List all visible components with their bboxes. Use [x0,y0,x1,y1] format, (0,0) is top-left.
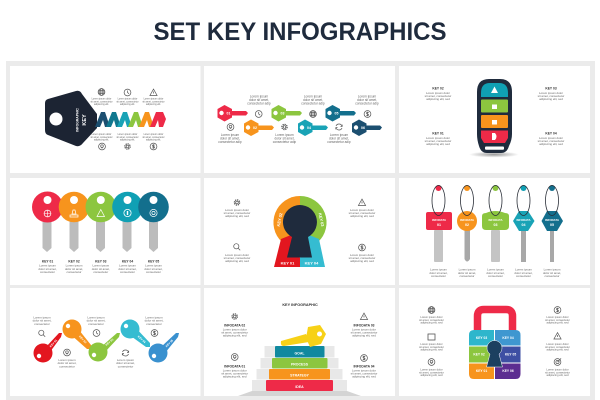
panel: padlock [419,307,570,379]
key head 01: INFODATA [432,218,446,222]
stairs right text: sit amet, consectetur [351,372,377,376]
key 06 navy: 06 [361,126,365,130]
lock text left: sit amet, consectetur [419,345,444,349]
key green: KEY 03 [104,337,115,347]
captions: dolor sit amet, [486,271,505,275]
lock text left: sit amet, consectetur [419,370,444,374]
text blocks top: Lorem ipsum dolor [118,98,138,100]
fob text KEY 01: adipiscing elit, sed [426,142,450,146]
key head 02: 02 [465,223,469,227]
lock labels: KEY 06 [502,369,514,373]
fob text KEY 01: KEY 01 [432,132,444,136]
captions: consectetur [118,364,133,368]
text blocks top [90,98,165,106]
key teal [120,320,150,347]
lock text left: adipiscing elit, sed [421,373,443,377]
lock text left: adipiscing elit, sed [421,348,443,352]
key captions: Lorem ipsum [66,264,83,268]
lock keyhole [486,341,502,367]
lock labels [473,336,516,373]
fob text KEY 04: sit amet, consectetur [538,139,564,143]
text blocks top: Lorem ipsum dolor [144,98,164,100]
fob text KEY 01: Lorem ipsum dolor [426,136,450,140]
fob text KEY 02: Lorem ipsum dolor [426,91,450,95]
key 02 orange [244,120,274,136]
captions: dolor sit amet, [87,318,106,322]
step idea: IDEA [295,385,304,389]
stair backgrounds [238,346,361,396]
captions: dolor sit amet, [458,271,476,275]
keyhole text: sit amet, consectetur [349,211,375,215]
lock text left [419,315,444,377]
leg blue [300,235,325,267]
fob text KEY 01 [425,132,451,146]
segment labels [276,212,325,266]
key rings [432,186,558,216]
timeline text: consectetur adip [218,140,242,144]
text blocks top: Lorem ipsum dolor [92,98,112,100]
key captions: KEY 01 [42,260,53,264]
stairs right text: Lorem ipsum dolor [352,328,376,332]
keyhole text [224,208,375,263]
keyhole text: Lorem ipsum dolor [225,253,249,257]
keyhole text: sit amet, consectetur [224,211,250,215]
fob shadow [469,152,519,158]
captions: Lorem ipsum [87,316,105,320]
captions: dolor sit amet, [429,271,448,275]
text blocks bottom: sit amet, consectetur [116,136,139,139]
timeline text: consectetur adip [247,102,271,106]
stairs right text: INFODATA 03 [353,324,375,328]
captions: Lorem ipsum [515,268,532,272]
stairs left text: sit amet, consectetur [221,330,248,334]
key captions: KEY 05 [148,260,159,264]
key red: KEY 01 [49,338,58,348]
key captions: KEY 04 [122,260,133,264]
text blocks bottom [90,133,165,142]
lock text right: adipiscing elit, sed [547,321,569,325]
captions: consectetur [545,274,560,278]
timeline text: dolor sit amet, [274,136,295,140]
key 06 navy [352,120,382,136]
key head 04: INFODATA [516,218,531,222]
captions: dolor sit amet, [58,361,77,365]
keyhole text: adipiscing elit, sed [225,259,249,263]
captions: Lorem ipsum [459,268,476,272]
key 04 teal: 04 [307,126,311,130]
key 01 red [218,105,248,122]
keyhole text: Lorem ipsum dolor [350,208,374,212]
fob text KEY 04: Lorem ipsum dolor [539,136,563,140]
segment labels: KEY 02 [276,212,284,227]
keyhole text: sit amet, consectetur [224,256,250,260]
panel: diagonal keys [33,316,179,368]
step strategy: STRATEGY [290,374,310,378]
key captions: Lorem ipsum [39,264,56,268]
ring dots [436,185,555,191]
key head 05: INFODATA [545,218,559,222]
stairs right text [351,313,377,378]
key captions: consectetur [146,270,161,274]
fob body [477,79,512,153]
fob text KEY 02: sit amet, consectetur [425,94,451,98]
timeline text: Lorem ipsum [221,133,240,137]
timeline text [218,94,379,144]
lock text right: sit amet, consectetur [545,345,570,349]
key head 02 [457,211,477,231]
stairs right text: adipiscing elit, sed [352,334,376,338]
step process: PROCESS [291,362,309,366]
key 05 head [138,192,169,222]
text blocks top: adipiscing elit. [146,103,161,106]
key captions: dolor sit amet, [92,267,110,271]
key head 02: INFODATA [460,218,474,222]
segment labels: KEY 01 [281,260,295,266]
panel: key fob [425,79,564,158]
timeline text: Lorem ipsum [358,94,377,98]
captions: dolor sit amet, [514,271,533,275]
captions: dolor sit amet, [543,271,561,275]
captions: consectetur [34,322,50,326]
key captions: consectetur [67,270,82,274]
key 05 blue [326,105,356,122]
lock text right: Lorem ipsum dolor [546,315,569,319]
key captions: dolor sit amet, [38,267,57,271]
stairs left text: adipiscing elit, sed [223,374,247,378]
stairs right text: INFODATA 04 [353,364,375,368]
key head 04 [513,211,534,231]
captions: consectetur [59,364,75,368]
key 01 head [32,192,63,222]
lock labels: KEY 03 [476,336,487,340]
key captions: consectetur [93,270,108,274]
lock segments [469,330,520,379]
lock labels: KEY 01 [476,369,487,373]
segment labels: KEY 04 [305,260,319,266]
timeline text: dolor sit amet, [329,136,349,140]
keyhole shape [283,205,317,258]
icons [39,330,158,356]
panel: hexagon keys timeline [218,94,382,144]
stairs left text: INFODATA 02 [224,324,245,328]
text blocks bottom: adipiscing elit. [120,138,135,142]
timeline text: consectetur adip [301,102,325,106]
captions: consectetur [488,274,503,278]
lock text right: Lorem ipsum dolor [546,342,569,346]
fob button red [481,130,508,143]
key head 01 [426,212,452,230]
timeline text: consectetur adip [355,102,379,106]
stairs left text: sit amet, consectetur [221,372,248,376]
text blocks bottom: sit amet, consectetur [142,136,165,139]
panel: five round keys [32,192,169,274]
keyhole text: Lorem ipsum dolor [350,253,374,257]
stairs left text: INFODATA 01 [224,364,245,368]
icons bottom [99,143,157,150]
fob text KEY 04: adipiscing elit, sed [539,142,563,146]
key orange [62,320,91,349]
key captions: Lorem ipsum [119,264,136,268]
stairs left text [221,314,248,378]
key blades [434,230,554,262]
lock text right: sit amet, consectetur [545,370,570,374]
key blue: KEY 05 [164,338,174,348]
zigzag blade [95,112,166,127]
timeline text: Lorem ipsum [330,133,349,137]
lock text right: adipiscing elit, sed [547,348,569,352]
ring left orange [273,196,300,242]
fob text KEY 02: KEY 02 [432,86,444,90]
step goal: GOAL [294,352,305,356]
captions: consectetur [460,274,475,278]
timeline text: Lorem ipsum [250,94,269,98]
step process [272,358,328,368]
key head label: INFOGRAPHIC [76,108,80,132]
timeline icons [227,111,371,130]
key head 04: 04 [522,223,526,227]
lock text right: sit amet, consectetur [545,318,570,322]
ring right green [300,196,327,242]
text blocks top: sit amet, consectetur [142,100,165,103]
lock text right: adipiscing elit, sed [547,373,569,377]
lock text left: Lorem ipsum dolor [420,368,443,372]
captions: Lorem ipsum [430,268,447,272]
fob button orange [481,115,508,128]
lock text right [545,315,570,377]
timeline text: Lorem ipsum [304,94,323,98]
key blades [42,220,158,252]
text blocks bottom: Lorem ipsum dolor [92,133,112,136]
text blocks top: adipiscing elit. [94,103,109,106]
timeline text: Lorem ipsum [275,133,294,137]
captions: dolor sit amet, [116,361,135,365]
leg red [274,235,300,267]
captions: consectetur [516,274,531,278]
keyhole text: adipiscing elit, sed [350,259,374,263]
key head 03 [482,211,509,230]
lock text left: adipiscing elit, sed [421,321,443,325]
key head 05: 05 [550,223,554,227]
fob text KEY 04: KEY 04 [545,132,557,136]
captions: Lorem ipsum [544,268,561,272]
key 03 head [86,192,116,222]
key teal: KEY 04 [137,335,147,344]
lock labels: KEY 05 [505,352,516,356]
lock icons right [554,307,561,365]
lock labels: KEY 04 [502,336,514,340]
keyhole text: Lorem ipsum dolor [225,208,249,212]
panel: large key with zigzag blade [45,89,166,150]
step goal [275,346,324,358]
key 02 orange: 02 [253,126,257,130]
captions: Lorem ipsum [145,316,163,320]
stairs left text: adipiscing elit, sed [223,334,247,338]
fob text KEY 03: KEY 03 [545,86,557,90]
key captions: Lorem ipsum [145,264,162,268]
fob button teal [481,83,508,97]
captions: Lorem ipsum [58,358,76,362]
key head [45,91,97,146]
key head 05 [542,211,563,231]
timeline text: dolor sit amet, [220,136,240,140]
text blocks top: sit amet, consectetur [90,100,113,103]
key captions: KEY 02 [68,260,80,264]
text blocks top: sit amet, consectetur [116,100,139,103]
captions: Lorem ipsum [487,268,504,272]
text blocks bottom: sit amet, consectetur [90,136,113,139]
title: SET KEY INFOGRAPHICS [154,18,446,46]
step strategy [269,369,330,380]
captions: dolor sit amet, [145,318,164,322]
lock text right: Lorem ipsum dolor [546,368,569,372]
key head 03: 03 [494,223,498,227]
key head 03: INFODATA [488,218,503,222]
icons top [98,89,157,96]
segment labels: KEY 03 [318,212,325,228]
fob text KEY 04 [538,132,564,146]
captions [33,316,164,368]
lock text left: Lorem ipsum dolor [420,315,443,319]
keyhole text: sit amet, consectetur [349,256,375,260]
text blocks bottom: Lorem ipsum dolor [118,133,138,136]
panel: hanging keys [426,185,563,278]
keyhole icons [234,199,366,251]
panel: keyhole [224,196,375,267]
lock labels: KEY 02 [473,352,485,356]
timeline text: consectetur adip [273,140,296,144]
key head label: KEY [82,114,88,126]
captions: consectetur [146,322,162,326]
captions: Lorem ipsum [117,358,135,362]
timeline text: dolor sit amet, [249,98,269,102]
text blocks bottom: adipiscing elit. [94,138,109,142]
captions: dolor sit amet, [33,318,52,322]
key hole [50,112,62,126]
key 02 head [59,192,89,222]
key captions [38,260,163,274]
fob text KEY 01: sit amet, consectetur [425,139,451,143]
captions: consectetur [431,274,446,278]
stairs left text: Lorem ipsum dolor [223,368,247,372]
fob text KEY 03: adipiscing elit, sed [539,97,563,101]
key 03 green: 03 [281,112,284,116]
captions [429,268,561,278]
keyhole text: adipiscing elit, sed [225,214,249,218]
lock icons left [428,307,435,365]
timeline text: consectetur adip [327,140,351,144]
key 04 head [112,192,143,222]
key head label [76,108,88,132]
panel heading: KEY INFOGRAPHIC [282,303,318,307]
stairs right text: sit amet, consectetur [351,330,377,334]
key captions: dolor sit amet, [65,267,83,271]
key captions: consectetur [120,270,135,274]
key red [34,333,62,362]
timeline text: dolor sit amet, [357,98,377,102]
key 04 teal [298,120,328,136]
key captions: Lorem ipsum [92,264,110,268]
stairs right text: Lorem ipsum dolor [352,368,376,372]
fob text KEY 02: adipiscing elit, sed [426,97,450,101]
text blocks bottom: Lorem ipsum dolor [144,133,164,136]
fob slot [485,146,504,150]
lock text left: Lorem ipsum dolor [420,342,443,346]
captions: consectetur [88,322,104,326]
icon: yellow key [281,325,326,347]
lock text left: sit amet, consectetur [419,318,444,322]
key 05 blue: 05 [335,112,338,116]
key captions: dolor sit amet, [144,267,163,271]
timeline text: dolor sit amet, [303,98,323,102]
fob text KEY 02 [425,86,451,101]
stairs left text: Lorem ipsum dolor [223,328,247,332]
key captions: KEY 03 [95,260,107,264]
keyhole text: adipiscing elit, sed [350,214,374,218]
stairs right text: adipiscing elit, sed [352,374,376,378]
key orange: KEY 02 [78,334,88,345]
panel: key on stairs [221,303,377,396]
key blue [148,333,179,362]
text blocks bottom: adipiscing elit. [146,138,161,142]
captions: Lorem ipsum [33,316,51,320]
key 01 red: 01 [227,112,230,116]
fob text KEY 03: sit amet, consectetur [538,94,564,98]
key green [88,333,120,362]
key 03 green [272,105,302,122]
key captions: dolor sit amet, [118,267,137,271]
fob text KEY 03 [538,86,564,101]
text blocks top: adipiscing elit. [120,103,135,106]
fob button green [481,100,508,112]
shackle [478,310,512,332]
fob text KEY 03: Lorem ipsum dolor [539,91,563,95]
key captions: consectetur [40,270,55,274]
step idea [266,380,333,391]
key head 01: 01 [437,223,441,227]
